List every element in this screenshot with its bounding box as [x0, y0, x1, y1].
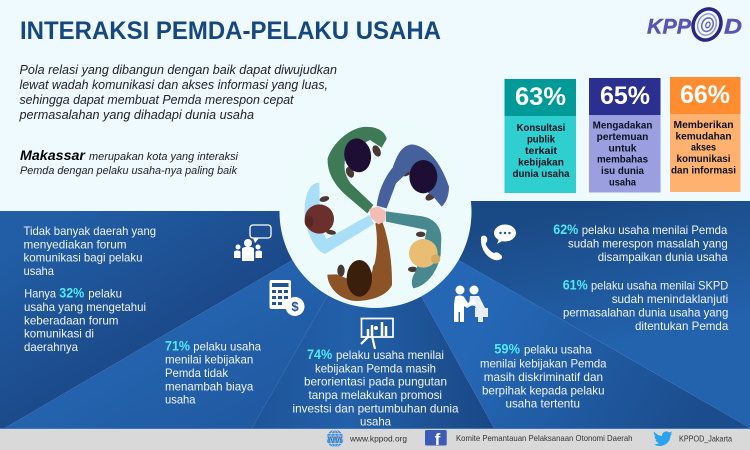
text: 59%: berpihak kepada pelaku [482, 383, 604, 397]
stat box: 65%: 65% [600, 82, 650, 110]
stat box: 63%: 63% [515, 83, 566, 111]
text: 32% [24, 285, 146, 354]
stat box: 65%: Mengadakan [593, 120, 652, 132]
text: 71%: menambah biaya [165, 379, 254, 393]
logo: KPPOD [647, 4, 742, 45]
icon: facebook: f [435, 430, 441, 449]
icon: phone with speech bubble [481, 224, 516, 260]
text: 62%: disampaikan dunia usaha [598, 250, 728, 264]
text: 61%: ditentukan Pemda [635, 319, 729, 333]
footer bar: Komite Pemantauan Pelaksanaan Otonomi Daerah [456, 433, 633, 443]
text: 61% [563, 276, 729, 333]
intro paragraph: lewat wadah komunikasi dan akses informasi yang luas, [20, 78, 328, 92]
text: 32%: 32% [59, 285, 85, 301]
footer bar: KPPOD_Jakarta [679, 434, 732, 444]
stat box: 63% [504, 79, 576, 193]
text: 61%: sudah menindaklanjuti [612, 292, 728, 306]
intro paragraph: Pola relasi yang dibangun dengan baik dapat diwujudkan [20, 63, 337, 77]
icon: handshake with briefcase [454, 286, 488, 322]
text: 62% [553, 221, 728, 264]
text: 62%: pelaku usaha menilai Pemda [582, 223, 728, 237]
text: 71% [165, 337, 261, 407]
text: 71%: 71% [165, 337, 190, 353]
text: 74%: usaha [360, 415, 391, 429]
text: forum availability: menyediakan forum [24, 238, 126, 252]
text: 74%: tanpa melakukan promosi [308, 388, 442, 402]
stat box: 65%: untuk [608, 142, 637, 154]
text: 32%: usaha yang mengetahui [24, 300, 146, 314]
text: 74% [292, 346, 459, 429]
icon: facebook [425, 430, 447, 449]
text: 71%: menilai kebijakan [165, 353, 253, 367]
text: 71%: usaha [165, 393, 196, 407]
stat box: 66%: 66% [680, 81, 730, 109]
stat box: 66%: dan informasi [671, 164, 736, 176]
stat box: 63%: Konsultasi [517, 122, 565, 134]
text: 32%: pelaku [88, 287, 122, 301]
clasped hands [369, 206, 386, 224]
text: 59%: 59% [494, 340, 520, 356]
text: forum availability: komunikasi bagi pelaku [24, 251, 142, 265]
stat box: 66%: komunikasi [676, 153, 731, 165]
stat box: 66%: Memberikan [674, 119, 734, 131]
Makassar statement: merupakan kota yang interaksi [89, 151, 239, 163]
Makassar statement: Makassar [20, 148, 86, 163]
text: 71%: Pemda tidak [165, 366, 229, 380]
person: teal [386, 211, 441, 288]
text: 59%: menilai kebijakan Pemda [480, 357, 607, 371]
text: 62%: 62% [553, 221, 579, 237]
stat box: 66%: akses [691, 142, 716, 154]
intro paragraph: sehingga dapat membuat Pemda merespon cepat [20, 93, 294, 107]
intro paragraph [18, 63, 337, 122]
icon: presentation board [360, 318, 393, 349]
intro paragraph: permasalahan yang dihadapi dunia usaha [18, 108, 254, 122]
logo: KPPOD: KPP [647, 14, 692, 38]
stat box: 63%: publik [527, 134, 555, 146]
text: 32%: keberadaan forum [24, 314, 118, 328]
text: 59%: pelaku usaha [524, 342, 592, 356]
text: 32%: daerahnya [24, 340, 78, 354]
person: light blue [305, 183, 374, 254]
person: green [328, 127, 387, 213]
text: 61%: permasalahan dunia usaha yang [563, 306, 728, 320]
text: forum availability: usaha [24, 264, 54, 278]
text: 59%: masih diskriminatif dan [484, 370, 603, 384]
icon: globe: WWW [328, 436, 342, 442]
icon: people with speech bubble [234, 225, 271, 261]
icon: calculator with dollar coin: $ [291, 299, 299, 314]
text: 61%: pelaku usaha menilai SKPD [591, 278, 729, 292]
person: brown [327, 221, 392, 301]
stat box: 66%: kemudahan [676, 130, 732, 142]
stat box: 63%: dunia usaha [512, 168, 570, 180]
text: 59% [480, 340, 607, 411]
text: 74%: berorientasi pada pungutan [304, 375, 447, 389]
stat box: 66% [670, 77, 740, 192]
text: forum availability: Tidak banyak daerah yang [24, 224, 156, 238]
Makassar statement [20, 148, 239, 177]
logo: KPPOD: D [724, 14, 742, 38]
stat box: 65% [589, 78, 660, 192]
text: 32%: komunikasi di [24, 327, 94, 341]
title: INTERAKSI PEMDA-PELAKU USAHA [20, 17, 441, 45]
panel: blue rays background [0, 201, 750, 428]
icon: globe [326, 430, 344, 447]
text: forum availability [24, 224, 156, 278]
footer bar [0, 428, 750, 450]
text: 74%: investsi dan pertumbuhan dunia [292, 401, 459, 415]
text: 74%: kebijakan Pemda masih [315, 361, 436, 375]
text: 71%: pelaku usaha [193, 339, 261, 353]
stat box: 63%: terkait [525, 145, 558, 157]
stat box: 65%: pertemuan [597, 131, 648, 143]
stat box: 63%: kebijakan [518, 156, 564, 168]
stat box: 65%: isu dunia [601, 165, 644, 177]
text: 74%: pelaku usaha menilai [336, 348, 444, 362]
text: 74%: 74% [307, 346, 333, 362]
icon: twitter [654, 431, 672, 446]
stat box: 65%: membahas [597, 154, 648, 166]
text: 32%: Hanya [24, 287, 56, 301]
Makassar statement: Pemda dengan pelaku usaha-nya paling baik [20, 165, 237, 177]
stat box: 65%: usaha [609, 176, 636, 188]
text: 59%: usaha tertentu [506, 397, 580, 411]
person: blue [377, 144, 449, 208]
icon: calculator with dollar coin [270, 280, 304, 316]
central circle with five people [280, 116, 472, 308]
footer bar: www.kppod.org [349, 434, 407, 444]
text: 61%: 61% [563, 276, 588, 292]
text: 62%: sudah merespon masalah yang [568, 237, 728, 251]
